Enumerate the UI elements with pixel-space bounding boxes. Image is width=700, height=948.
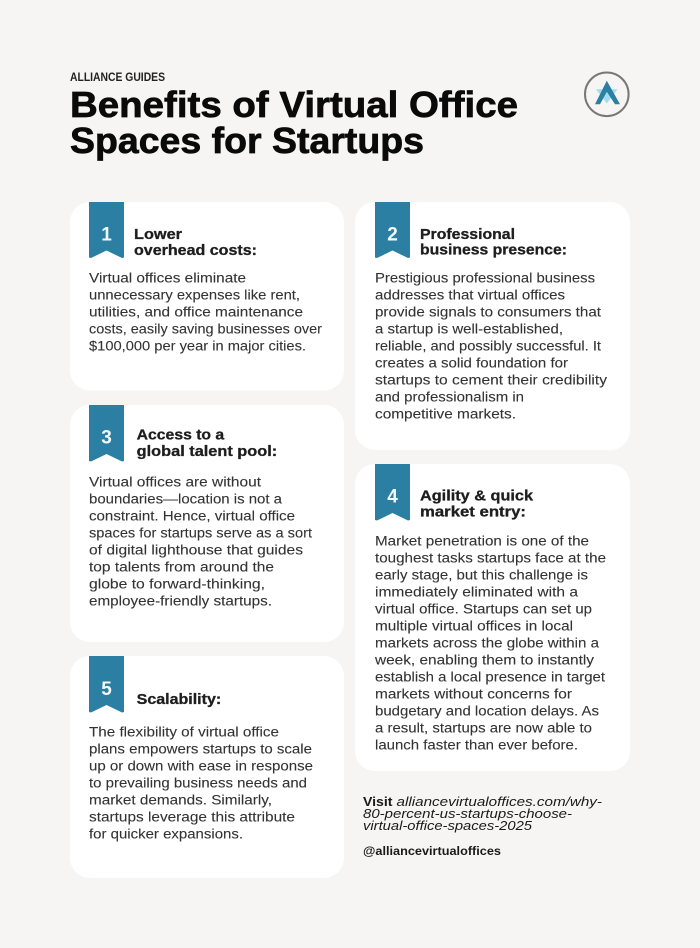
text block: card 2 body: provide signals to consumers that [375,305,601,320]
text block: card 2 body: reliable, and possibly successful. It [375,339,601,354]
text block: card 2 body: addresses that virtual offices [375,288,565,303]
heading: lower overhead costs [134,227,257,259]
icon: ribbon 3 [89,405,124,462]
heading: scalability: Scalability: [137,692,221,708]
heading: professional business presence: business presence: [420,243,567,259]
text block: card 2 body [375,271,607,422]
heading: access to a global talent pool: global talent pool: [137,444,277,460]
text block: card 3 body: boundaries—location is not a [89,492,283,507]
footer: visit link: virtual-office-spaces-2025 [363,818,533,833]
text block: card 5 body: market demands. Similarly, [89,793,272,808]
text block: card 3 body: employee-friendly startups. [89,594,272,609]
footer: visit link: Visit [363,794,393,809]
panel: agility and quick market entry [355,464,630,771]
text block: card 4 body: Market penetration is one of the [375,533,589,548]
text block: card 1 body: Virtual offices eliminate [89,271,246,286]
text block: card 5 body: to prevailing business needs and [89,776,307,791]
text block: card 3 body: spaces for startups serve as a sort [89,526,312,541]
text block: card 2 body: competitive markets. [375,407,516,422]
text block: card 5 body: plans empowers startups to scale [89,742,312,757]
footer: visit link: alliancevirtualoffices.com/why- [396,794,603,809]
title: Benefits of Virtual Office [70,84,518,125]
icon: ribbon 4 [375,464,410,520]
panel: lower overhead costs [70,202,344,390]
text block: card 2 body: Prestigious professional business [375,271,595,286]
text block: card 4 body: early stage, but this challenge is [375,567,588,582]
text block: card 4 body: launch faster than ever before. [375,737,578,752]
text block: card 4 body: virtual office. Startups can set up [375,601,592,616]
footer: visit link [363,794,603,833]
text block: card 5 body [89,725,313,842]
text block: card 5 body: The flexibility of virtual office [89,725,279,740]
icon: ribbon 2: 2 [387,224,398,246]
heading: agility and quick market entry: Agility & quick [420,489,534,505]
text block: card 3 body: Virtual offices are without [89,475,261,490]
text block: card 4 body: budgetary and location delays. As [375,703,599,718]
text block: card 4 body: multiple virtual offices in local [375,618,573,633]
text block: card 1 body: $100,000 per year in major cities. [89,339,306,354]
text block: card 3 body: constraint. Hence, virtual office [89,509,295,524]
icon: ribbon 1 [89,202,124,258]
heading: professional business presence [420,227,567,259]
text block: card 5 body: for quicker expansions. [89,827,243,842]
text block: card 1 body [89,271,323,354]
text block: card 3 body: top talents from around the [89,560,274,575]
text block: card 4 body: markets across the globe within a [375,635,600,650]
eyebrow: Alliance Guides: ALLIANCE GUIDES [70,72,165,84]
heading: lower overhead costs: overhead costs: [134,243,257,259]
panel: access to a global talent pool [70,405,344,642]
text block: card 2 body: creates a solid foundation for [375,356,569,371]
heading: access to a global talent pool [137,428,277,460]
panel: professional business presence [355,202,630,450]
text block: card 3 body: globe to forward-thinking, [89,577,265,592]
footer: social handle: @alliancevirtualoffices [363,844,501,858]
title [70,84,518,161]
text block: card 2 body: a startup is well-established, [375,322,563,337]
heading: agility and quick market entry: market entry: [420,505,526,521]
icon: ribbon 5 [89,656,124,712]
text block: card 4 body [374,533,606,752]
text block: card 4 body: toughest tasks startups face at the [375,550,606,565]
text block: card 3 body: of digital lighthouse that guides [89,543,303,558]
text block: card 3 body [89,475,312,609]
text block: card 4 body: markets without concerns for [375,686,573,701]
text block: card 4 body: establish a local presence in target [375,669,605,684]
text block: card 2 body: startups to cement their credibility [375,373,607,388]
panel: scalability [70,656,344,878]
heading: lower overhead costs: Lower [134,227,182,243]
title: Spaces for Startups [70,120,424,161]
text block: card 5 body: up or down with ease in response [89,759,313,774]
icon: ribbon 3: 3 [101,428,112,448]
heading: professional business presence: Professional [420,227,515,243]
icon: ribbon 4: 4 [387,486,398,508]
icon: ribbon 2 [375,202,410,258]
heading: agility and quick market entry [420,489,534,521]
icon: ribbon 5: 5 [101,679,112,700]
text block: card 4 body: a result, startups are now able to [375,720,592,735]
text block: card 4 body: immediately eliminated with a [375,584,579,599]
text block: card 5 body: startups leverage this attribute [89,810,295,825]
text block: card 1 body: unnecessary expenses like rent, [89,288,300,303]
footer: visit link: 80-percent-us-startups-choose- [363,806,573,821]
icon: Alliance logo [585,72,629,116]
heading: access to a global talent pool: Access to a [137,428,225,444]
text block: card 2 body: and professionalism in [375,390,524,405]
text block: card 1 body: costs, easily saving businesses over [89,322,323,337]
text block: card 1 body: utilities, and office maintenance [89,305,303,320]
icon: ribbon 1: 1 [101,224,112,246]
text block: card 4 body: week, enabling them to instantly [374,652,594,667]
